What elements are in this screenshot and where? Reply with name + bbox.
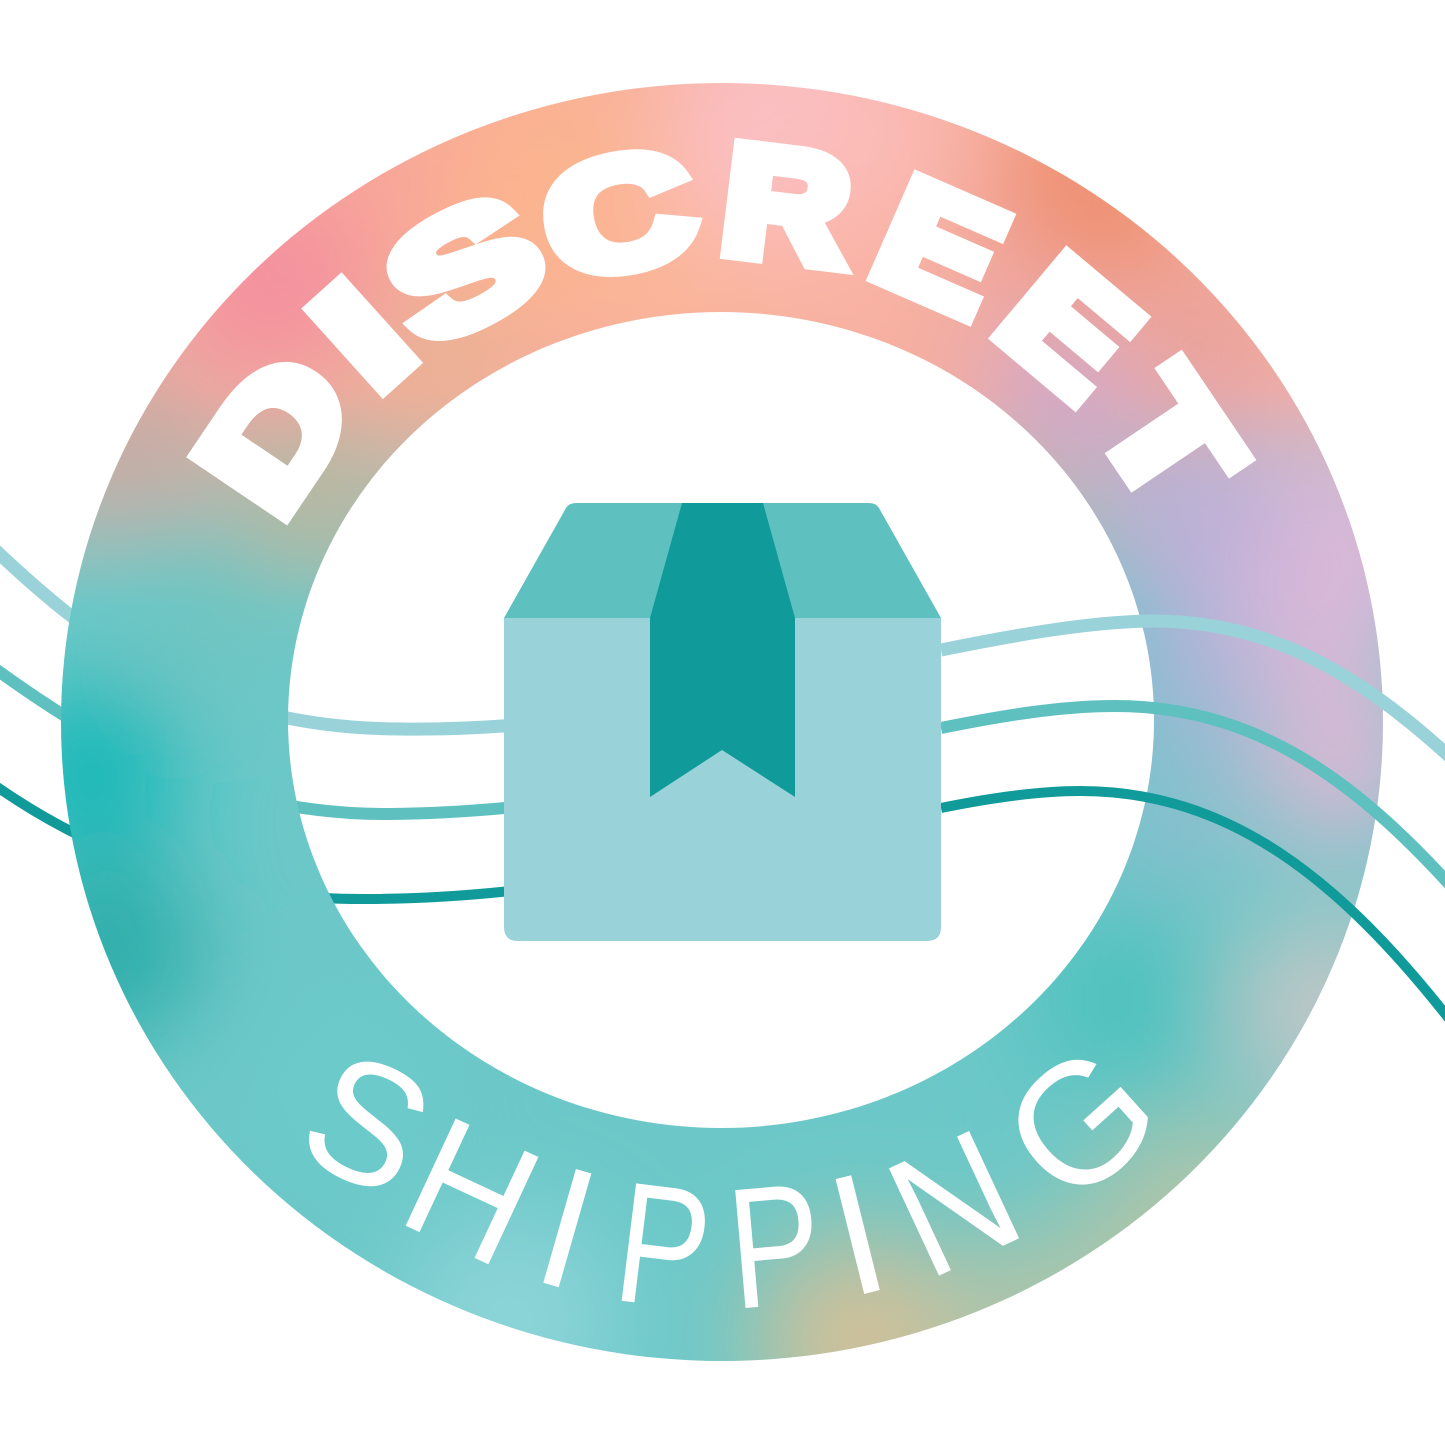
- heading: SHIPPING: [275, 1007, 1194, 1348]
- heading: DISCREET: I: [282, 252, 443, 420]
- heading: SHIPPING: I: [518, 1129, 617, 1327]
- wavy lines behind ring: [0, 546, 504, 904]
- heading: SHIPPING: P: [606, 1146, 720, 1348]
- heading: DISCREET: D: [163, 325, 387, 542]
- heading: SHIPPING: H: [378, 1079, 566, 1303]
- heading: SHIPPING: N: [862, 1092, 1047, 1315]
- wavy lines over ring on right: [941, 621, 1445, 1020]
- heading: DISCREET: E: [970, 224, 1169, 430]
- heading: DISCREET: S: [360, 159, 569, 379]
- heading: DISCREET: [163, 112, 1273, 542]
- heading: SHIPPING: G: [967, 1007, 1194, 1239]
- heading: SHIPPING: I: [811, 1136, 904, 1334]
- heading: SHIPPING: P: [721, 1147, 829, 1346]
- icon: parcel box: [504, 503, 941, 941]
- heading: DISCREET: R: [714, 112, 859, 298]
- heading: SHIPPING: S: [275, 1013, 458, 1235]
- heading: DISCREET: C: [530, 116, 707, 313]
- heading: DISCREET: E: [853, 145, 1028, 349]
- heading: DISCREET: T: [1065, 342, 1273, 536]
